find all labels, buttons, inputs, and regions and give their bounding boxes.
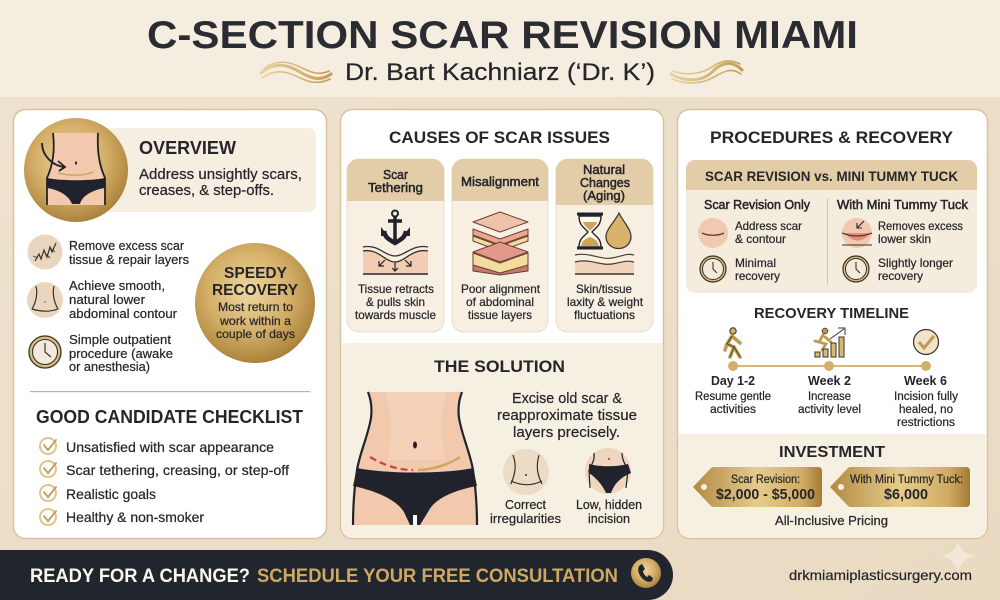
card: natural changes: Natural [583,162,625,177]
callout: speedy recovery: couple of days [216,327,295,341]
callout: speedy recovery: SPEEDY [224,265,288,282]
benefit: remove scar: Remove excess scar [69,238,185,253]
card: natural changes: laxity & weight [567,295,644,309]
price tag: mini tummy tuck: With Mini Tummy Tuck: [850,474,963,486]
checklist [40,438,289,525]
step: week 6: Incision fully [894,391,958,403]
step: day 1-2: Day 1-2 [711,373,755,388]
website: drkmiamiplasticsurgery.com [789,567,972,583]
pricing note: All-Inclusive Pricing [775,514,888,528]
icon: clock [700,256,726,282]
header band [0,0,1000,97]
price tag: mini tummy tuck: $6,000 [884,486,928,503]
icon: clock [29,336,61,368]
card: scar tethering: Scar [383,167,409,182]
card: scar tethering: Tethering [368,180,423,195]
price tag: scar revision: Scar Revision: [731,474,800,486]
icon: hidden incision [585,448,631,494]
column: with mini tummy tuck: Slightly longer [878,256,953,270]
column: with mini tummy tuck [837,197,968,283]
benefit: outpatient: procedure (awake [69,346,173,361]
icon: abdomen in gold circle [24,118,128,222]
callout: speedy recovery: RECOVERY [212,282,299,299]
overview text: creases, & step-offs. [139,182,274,199]
price tag: scar revision [693,467,822,507]
label: correct irregularities: Correct [505,498,547,512]
benefit: outpatient [69,332,173,374]
figure: abdomen with incision [353,392,477,525]
column: with mini tummy tuck: recovery [878,269,923,283]
benefit: outpatient: or anesthesia) [69,359,150,374]
icon: check badge [914,330,938,354]
step: week 2 [798,373,861,416]
benefit: contour: Achieve smooth, [69,278,165,293]
card: misalignment: of abdominal [466,295,534,309]
icon: clock [843,256,869,282]
section: investment [678,434,987,538]
step: week 6: Week 6 [904,373,947,388]
column: scar revision only: Address scar [735,219,802,233]
icon: excess skin [842,218,872,248]
card: natural changes: Skin/tissue [576,282,632,296]
callout: speedy recovery: work within a [219,314,291,328]
label: hidden incision [576,498,642,526]
solution text [497,390,637,441]
solution text: reapproximate tissue [497,407,637,424]
benefit: outpatient: Simple outpatient [69,332,171,347]
card: natural changes: (Aging) [583,188,625,203]
callout: speedy recovery: Most return to [218,300,293,314]
recovery timeline: RECOVERY TIMELINE [754,305,909,322]
column: with mini tummy tuck: lower skin [878,232,931,246]
comparison table [686,160,977,293]
column: scar revision only: Minimal [735,256,776,270]
solution heading: THE SOLUTION [434,357,565,376]
decorative star [941,540,976,572]
card: scar tethering: towards muscle [355,308,436,322]
section: investment: INVESTMENT [779,444,885,461]
card: misalignment: Poor alignment [461,282,541,296]
comparison table: SCAR REVISION vs. MINI TUMMY TUCK [705,168,958,184]
causes heading: CAUSES OF SCAR ISSUES [389,128,610,147]
timeline line [728,361,931,371]
benefit: contour: natural lower [69,292,146,307]
label: correct irregularities: irregularities [490,512,561,526]
benefit: contour: abdominal contour [69,306,178,321]
step: day 1-2: activities [710,404,756,416]
title: C-SECTION SCAR REVISION MIAMI [147,14,858,57]
icon: anchor and tissue [363,210,428,274]
card: scar tethering [347,159,444,332]
step: day 1-2: Resume gentle [695,391,771,403]
checklist heading: GOOD CANDIDATE CHECKLIST [36,407,303,427]
card: misalignment: tissue layers [468,308,532,322]
step: day 1-2 [695,373,771,416]
card: natural changes [556,159,653,332]
column: scar revision only: Scar Revision Only [704,197,810,212]
call to action bar [0,550,673,600]
card: natural changes: fluctuations [574,308,635,322]
icon: contour [27,282,63,318]
card: scar tethering: & pulls skin [366,295,425,309]
benefit: contour [69,278,178,321]
overview text [139,166,302,199]
checklist: Unsatisfied with scar appearance [66,439,274,455]
recovery timeline [695,305,958,429]
checklist: Healthy & non-smoker [66,509,204,525]
checklist: Scar tethering, creasing, or step-off [66,462,289,478]
call to action text: READY FOR A CHANGE? [30,566,250,587]
icon: lax skin [575,254,634,274]
icon: hourglass [577,214,603,248]
icon: phone [631,558,661,588]
card: misalignment [452,159,548,332]
procedures heading: PROCEDURES & RECOVERY [710,128,954,147]
column: scar revision only: recovery [735,269,780,283]
panel: procedures and recovery [678,110,988,538]
benefit: remove scar: tissue & repair layers [69,252,189,267]
check icons [40,438,56,525]
overview heading: OVERVIEW [139,138,236,158]
step: week 2: Week 2 [808,373,851,388]
step: week 6: restrictions [897,417,955,429]
left gold swoosh [261,62,331,82]
call to action bar: SCHEDULE YOUR FREE CONSULTATION [257,566,618,587]
right gold swoosh [671,61,742,83]
step: week 2: activity level [798,404,861,416]
subtitle: Dr. Bart Kachniarz (‘Dr. K’) [345,59,655,86]
overview text: Address unsightly scars, [139,166,302,183]
price tag: scar revision: $2,000 - $5,000 [716,486,815,503]
card: scar tethering: Tissue retracts [358,282,434,296]
column: scar revision only [698,197,810,283]
checklist: Realistic goals [66,486,156,502]
label: hidden incision: incision [588,512,630,526]
panel: overview and checklist [14,110,326,538]
icon: rising activity chart [815,328,845,357]
overview box [100,128,316,212]
panel: causes and solution [340,110,664,538]
label: correct irregularities [490,498,561,526]
price tag: mini tummy tuck [830,467,970,507]
card: misalignment: Misalignment [461,174,539,189]
step: week 2: Increase [808,391,851,403]
card: natural changes: Changes [580,175,630,190]
icon: drop [606,213,631,248]
step: week 6 [894,373,958,429]
icon: scar line [698,218,728,248]
column: with mini tummy tuck: Removes excess [878,219,963,233]
icon: correct irregularities [503,449,549,495]
section: the solution [341,343,663,538]
solution text: layers precisely. [513,424,620,441]
icon: tissue layers [473,212,528,275]
solution text: Excise old scar & [512,390,622,407]
label: hidden incision: Low, hidden [576,498,642,512]
column: with mini tummy tuck: With Mini Tummy Tuck [837,197,968,212]
callout: speedy recovery [195,243,315,363]
column: scar revision only: & contour [735,232,786,246]
icon: walking person [725,328,740,357]
step: week 6: healed, no [899,404,953,416]
icon: scar [28,234,62,270]
benefit: remove scar [69,238,189,267]
